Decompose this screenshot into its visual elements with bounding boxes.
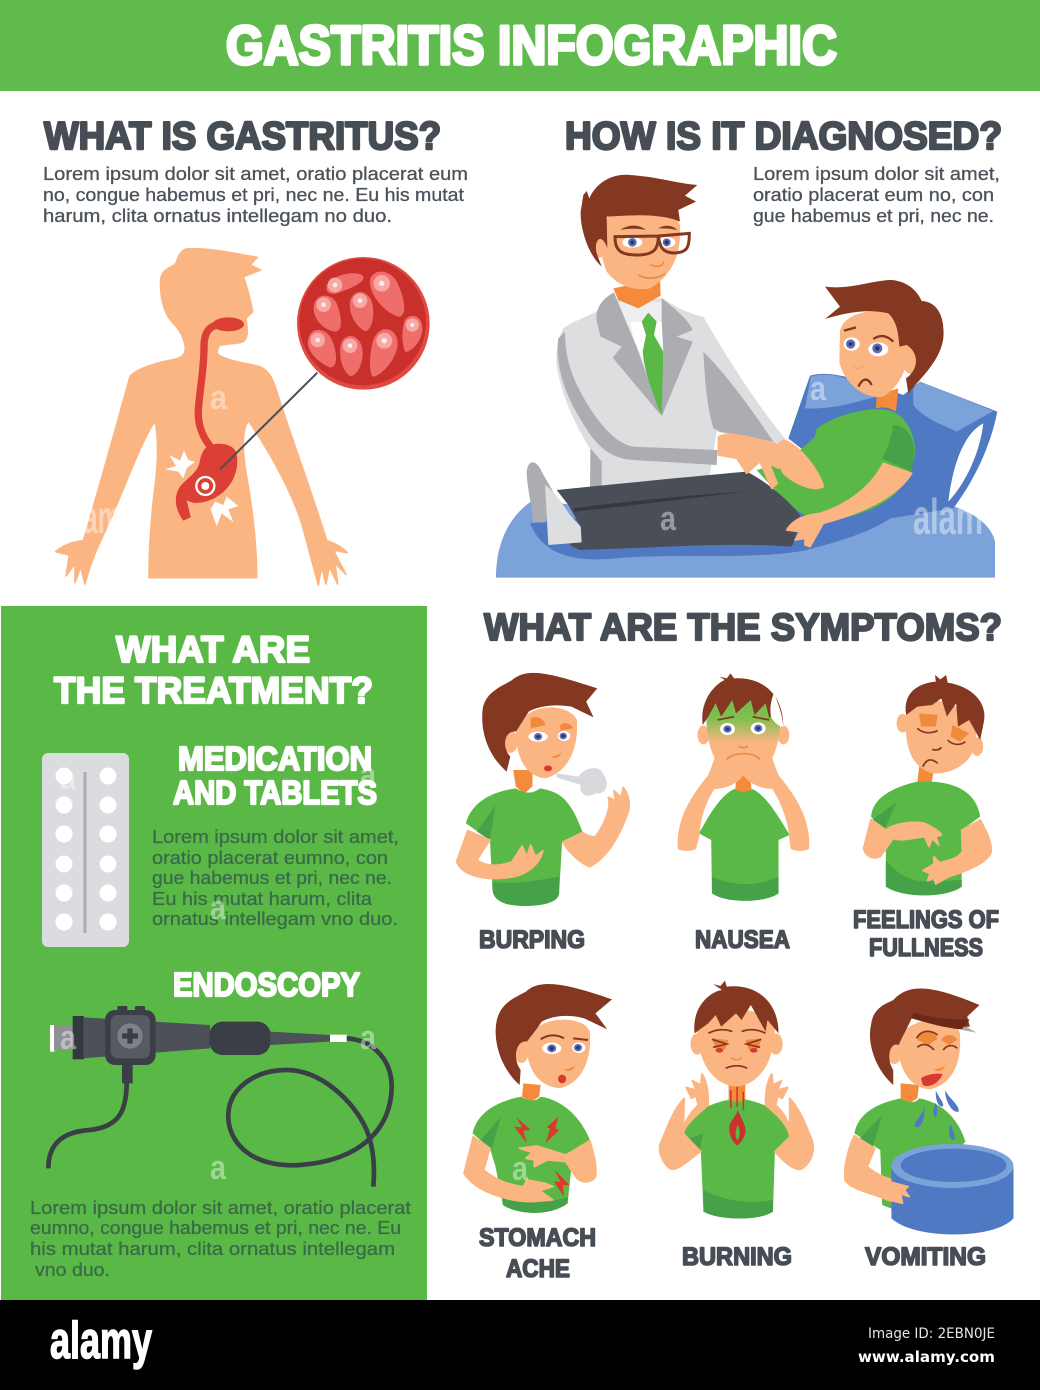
patient torso: [757, 409, 915, 520]
stomach: [176, 444, 237, 521]
bed sheet fold: [530, 418, 925, 559]
text block: medication: gue habemus et pri, nec ne.: [152, 867, 392, 888]
heading: treatment: WHAT ARE: [116, 629, 310, 670]
patient sleeve: [882, 425, 914, 472]
pillow: [788, 374, 997, 518]
text block: how is it diagnosed: [753, 163, 1000, 226]
text block: what is gastritus: no, congue habemus et pri, nec ne. Eu his mutat: [43, 184, 464, 205]
watermark marks: a: [660, 500, 677, 538]
body silhouette: [56, 249, 347, 585]
text block: endoscopy: eumno, congue habemus et pri, nec ne. Eu: [30, 1217, 401, 1238]
footer url: www.alamy.com: [858, 1348, 995, 1366]
watermark marks: a: [360, 756, 377, 794]
watermark marks: a: [512, 1150, 529, 1188]
watermark marks: a: [810, 370, 827, 408]
patient feet: [527, 462, 582, 545]
patient head: [825, 280, 944, 397]
symptom figure: nausea: [678, 673, 808, 901]
title: GASTRITIS INFOGRAPHIC: [226, 14, 837, 76]
symptom figure: feelings of fullness: [864, 675, 991, 895]
symptom label: stomach ache: ACHE: [506, 1255, 570, 1283]
watermark marks: a: [210, 379, 228, 417]
text block: medication: Lorem ipsum dolor sit amet,: [152, 826, 399, 847]
symptom label: feelings of fullness: [853, 906, 999, 962]
bed mattress: [496, 498, 995, 578]
symptom label: stomach ache: STOMACH: [479, 1224, 596, 1252]
watermark marks: a: [210, 1149, 227, 1187]
shirt and tie: [618, 302, 663, 417]
doctor coat: [556, 292, 785, 490]
symptom label: feelings of fullness: FEELINGS OF: [853, 906, 999, 934]
text block: how is it diagnosed: Lorem ipsum dolor sit amet,: [753, 163, 1000, 184]
pain spark right: [211, 497, 238, 526]
doctor head: [581, 175, 697, 289]
text block: what is gastritus: Lorem ipsum dolor sit amet, oratio placerat eum: [43, 163, 468, 184]
footer bar: [0, 1300, 1040, 1390]
watermark marks: alam: [913, 489, 983, 545]
esophagus: [198, 324, 222, 452]
icon: pill blister pack: [42, 753, 129, 947]
panel: treatment: [1, 606, 427, 1300]
heading: treatment: [54, 629, 373, 711]
watermark marks: a: [60, 1019, 77, 1057]
symptom figure: burping: [457, 673, 629, 906]
icon: endoscope: [48, 1006, 392, 1187]
magnified cells: [297, 257, 430, 390]
text block: endoscopy: vno duo.: [35, 1259, 110, 1280]
text block: medication: oratio placerat eumno, con: [152, 847, 388, 868]
symptom label: burping: BURPING: [479, 926, 585, 954]
doctor hands: [718, 435, 784, 488]
doctor neck: [613, 278, 661, 308]
symptom label: feelings of fullness: FULLNESS: [869, 934, 983, 962]
body diagram with stomach and magnified cells: [56, 249, 430, 585]
text block: endoscopy: his mutat harum, clita ornatus intellegam: [30, 1238, 395, 1259]
heading: how is it diagnosed: HOW IS IT DIAGNOSED?: [565, 115, 1002, 158]
footer image id: Image ID: 2EBN0JE: [868, 1326, 995, 1342]
text block: medication: Eu his mutat harum, clita: [152, 888, 373, 909]
watermark marks: a: [210, 889, 227, 927]
text block: medication: [152, 826, 399, 929]
heading: endoscopy: ENDOSCOPY: [173, 966, 360, 1003]
symptom label: nausea: NAUSEA: [695, 926, 790, 954]
watermark marks: [60, 370, 983, 1188]
connector line: [220, 373, 317, 469]
text block: how is it diagnosed: oratio placerat eum no, con: [753, 184, 994, 205]
header banner: [0, 0, 1040, 91]
watermark marks: am: [83, 491, 121, 543]
symptom figure: stomach ache: [464, 984, 612, 1213]
watermark marks: a: [360, 1019, 377, 1057]
pain spark left: [165, 451, 195, 478]
text block: what is gastritus: harum, clita ornatus intellegam no duo.: [43, 205, 392, 226]
patient arm and hand: [787, 463, 912, 547]
text block: medication: ornatus intellegam vno duo.: [152, 908, 398, 929]
heading: medication and tablets: [173, 740, 377, 811]
symptom label: burning: BURNING: [682, 1243, 792, 1271]
text block: endoscopy: Lorem ipsum dolor sit amet, oratio placerat: [30, 1197, 411, 1218]
heading: symptoms: WHAT ARE THE SYMPTOMS?: [484, 607, 1002, 649]
symptom label: vomiting: VOMITING: [865, 1243, 986, 1271]
symptom figure: vomiting: [845, 988, 1014, 1235]
mouth cavity: [213, 317, 244, 331]
footer logo: alamy: [50, 1312, 152, 1370]
symptom label: stomach ache: [479, 1224, 596, 1283]
text block: endoscopy: [30, 1197, 411, 1280]
pain target: [196, 477, 214, 495]
heading: medication and tablets: MEDICATION: [178, 740, 372, 777]
bowl: [891, 1167, 1014, 1235]
heading: what is gastritus: WHAT IS GASTRITUS?: [44, 115, 441, 158]
text block: what is gastritus: [43, 163, 468, 226]
watermark marks: a: [60, 759, 77, 797]
heading: medication and tablets: AND TABLETS: [173, 774, 377, 811]
heading: treatment: THE TREATMENT?: [54, 670, 373, 711]
patient neck: [876, 388, 898, 412]
symptom figure: burning: [660, 981, 813, 1219]
text block: how is it diagnosed: gue habemus et pri, nec ne.: [753, 205, 994, 226]
lapels: [596, 292, 661, 415]
doctor examining patient scene: [496, 175, 997, 578]
patient pants: [557, 472, 800, 550]
